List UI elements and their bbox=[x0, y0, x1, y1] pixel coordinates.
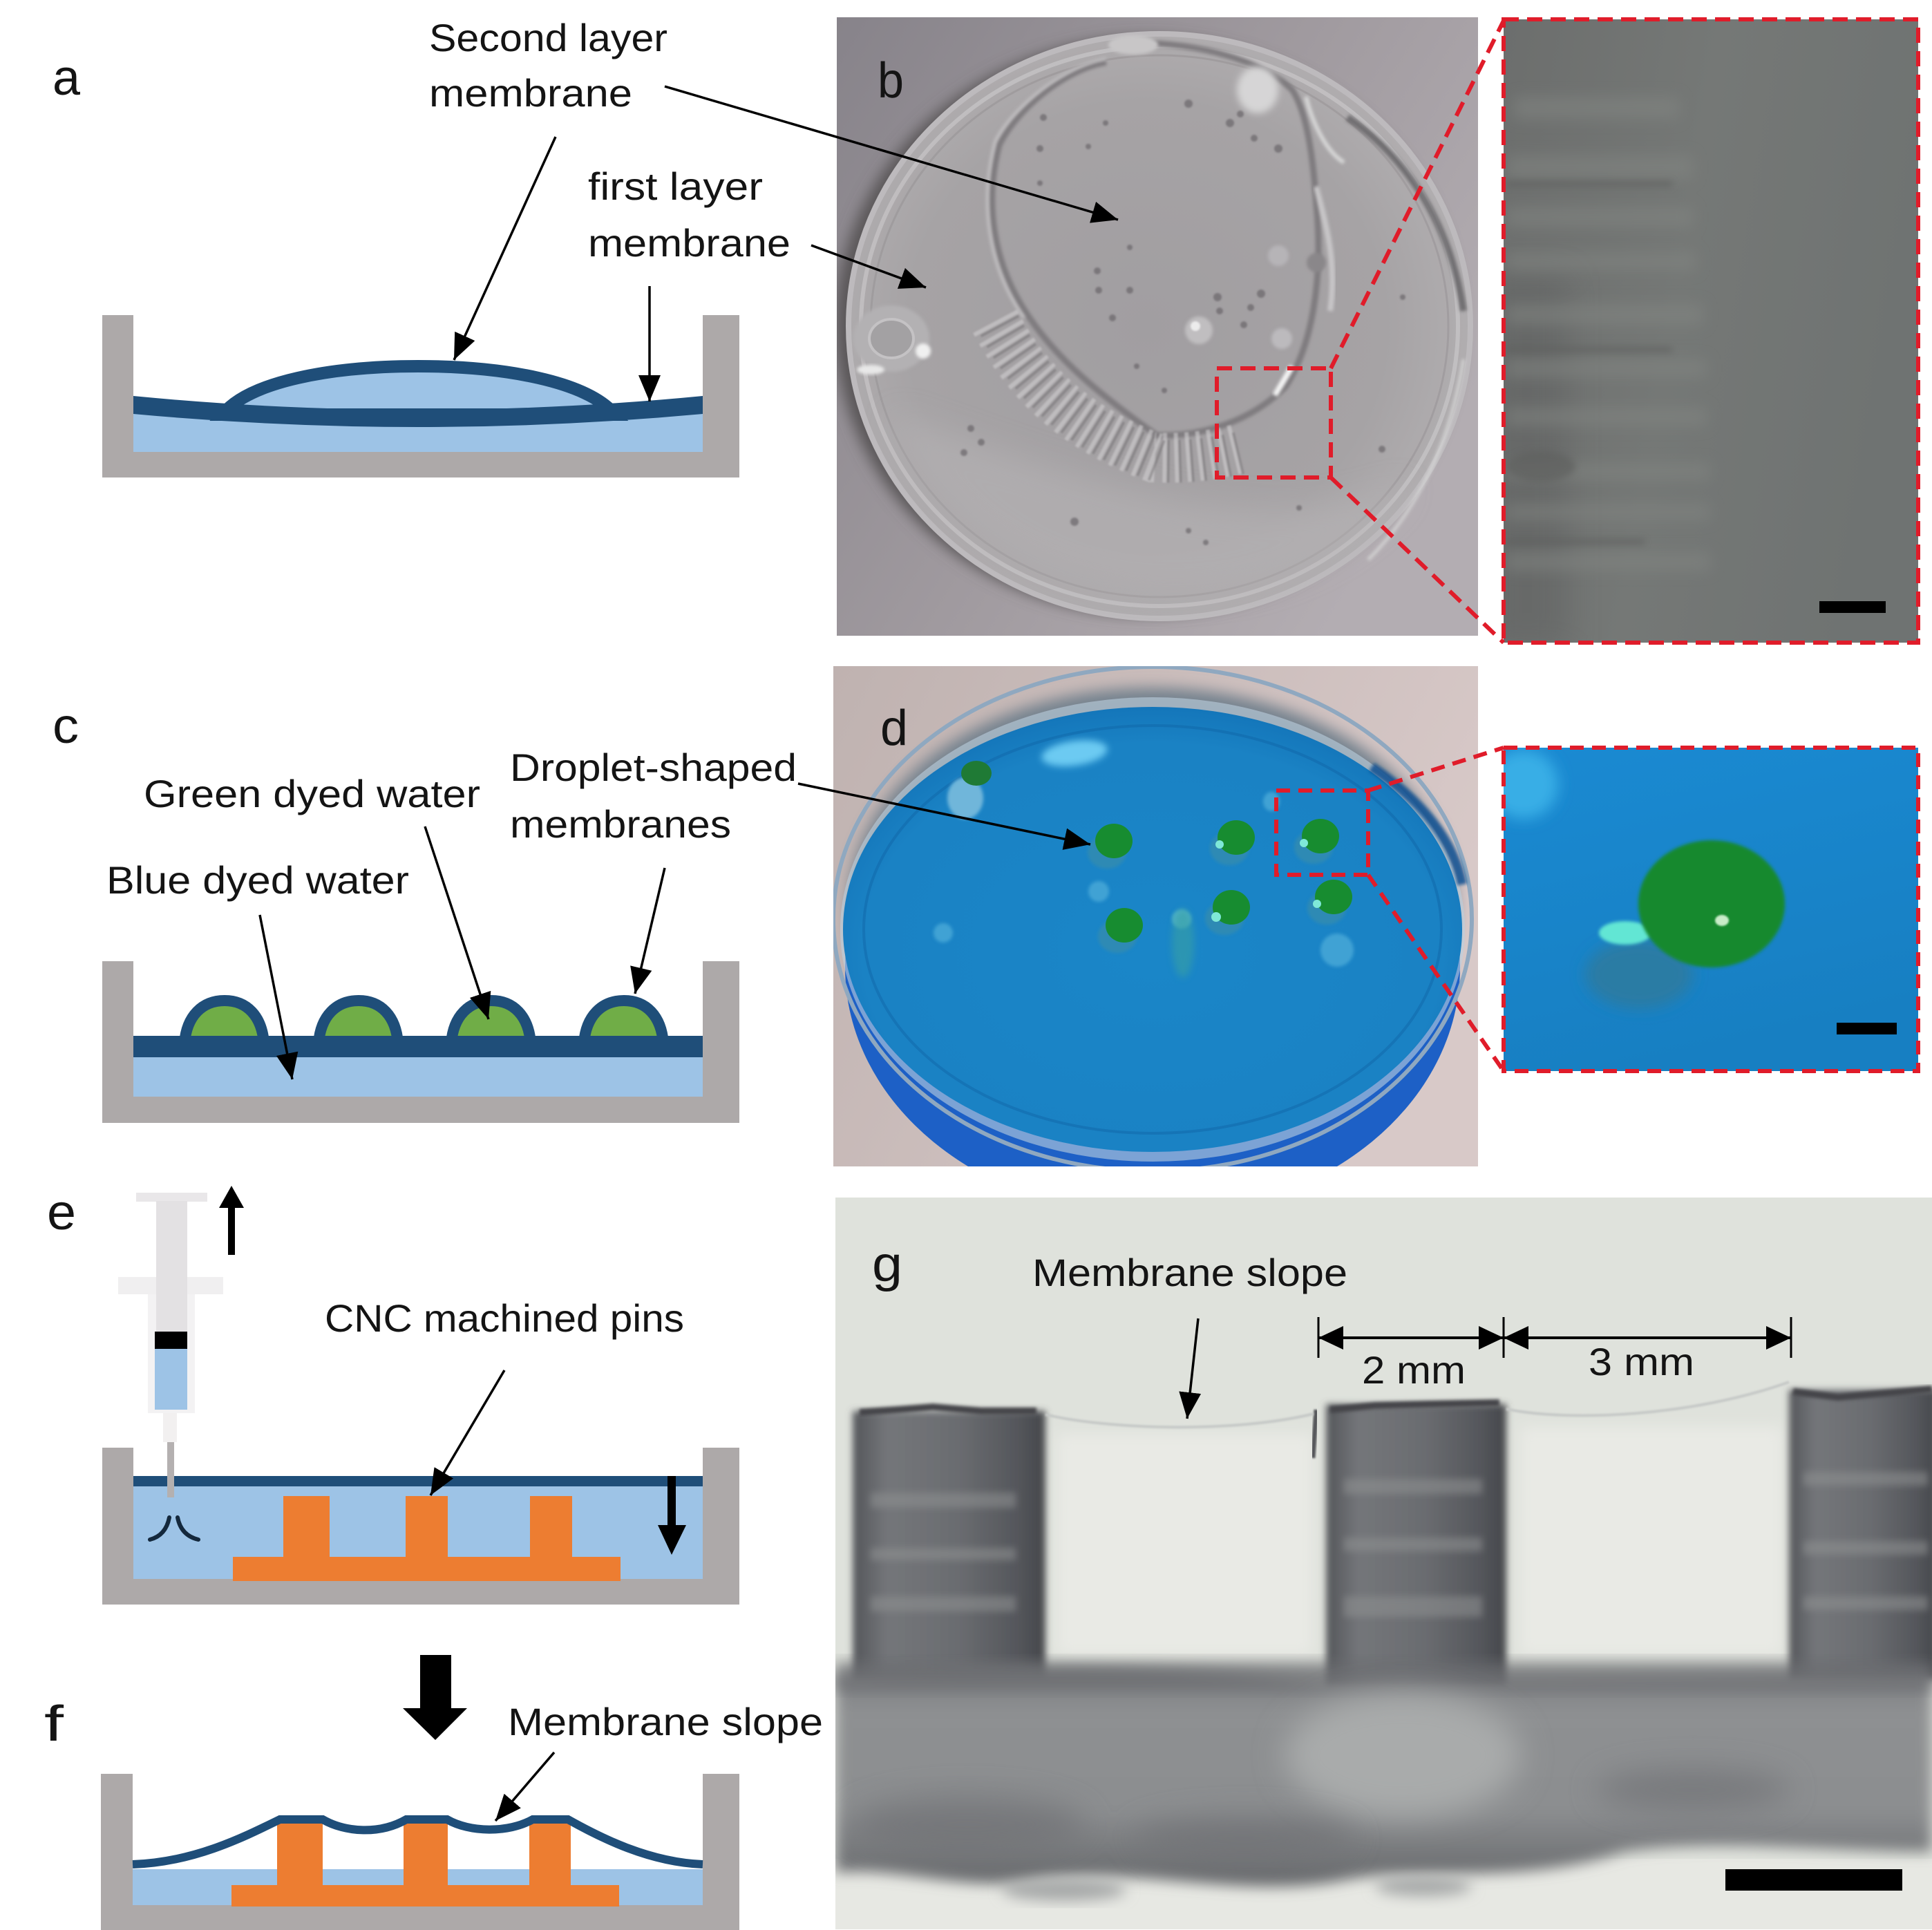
arrow: syringe up bbox=[219, 1186, 244, 1255]
callout arrows bbox=[260, 86, 1198, 1821]
faint green trails bbox=[1172, 909, 1194, 978]
droplet shadow bbox=[1585, 940, 1693, 1009]
panel f: membrane slope schematic bbox=[101, 1774, 739, 1930]
first layer membrane bbox=[133, 396, 703, 427]
arrow: level down bbox=[658, 1476, 686, 1555]
panel letter e: e bbox=[47, 1185, 76, 1240]
droplet highlight bbox=[1599, 921, 1651, 945]
dish b bbox=[849, 34, 1470, 618]
radial ribs bbox=[995, 321, 1241, 462]
label: first layer membrane: first layer bbox=[588, 164, 763, 208]
arrow: first layer to membrane bbox=[648, 286, 651, 401]
panel a: membrane schematic bbox=[102, 315, 739, 477]
panel c: droplet schematic bbox=[102, 961, 739, 1123]
base dark patches bbox=[850, 1769, 1790, 1859]
label: membrane slope g: Membrane slope bbox=[1032, 1251, 1347, 1294]
background b bbox=[837, 17, 1478, 636]
container f bbox=[101, 1774, 739, 1930]
label: droplet-shaped membranes bbox=[510, 746, 797, 846]
arrow: droplet photo bbox=[798, 784, 1090, 844]
panel letter g: g bbox=[872, 1237, 902, 1292]
inset b background bbox=[1504, 19, 1918, 643]
droplet specular bbox=[1715, 915, 1729, 926]
base top dark blur bbox=[835, 1662, 1932, 1690]
dish lens bbox=[853, 305, 931, 375]
label: CNC machined pins: CNC machined pins bbox=[325, 1296, 684, 1340]
arrow: membrane slope f bbox=[495, 1752, 554, 1821]
air bubbles bbox=[960, 100, 1405, 545]
arrow: process step bbox=[403, 1655, 467, 1740]
lower background bbox=[835, 1859, 1932, 1929]
panel letter f: f bbox=[44, 1696, 64, 1752]
membrane e bbox=[133, 1476, 703, 1486]
photo g: pins with membrane bbox=[835, 1198, 1932, 1929]
arrow: second layer to dome bbox=[454, 137, 556, 360]
arrow: green water bbox=[425, 826, 489, 1019]
membrane film bbox=[1045, 1382, 1789, 1427]
arrow: blue water bbox=[260, 915, 292, 1079]
arrow: second layer to photo bbox=[665, 86, 1118, 220]
label: second layer membrane: membrane bbox=[429, 71, 632, 115]
small bubbles d bbox=[934, 792, 1354, 967]
frayed membrane edge bbox=[1313, 1410, 1316, 1458]
second layer boundary bbox=[992, 43, 1318, 435]
panel letter a: a bbox=[53, 50, 81, 106]
scale bar d bbox=[1837, 1023, 1897, 1034]
photo b: membrane in dish bbox=[835, 17, 1478, 636]
injection jets bbox=[150, 1517, 198, 1540]
pins g bbox=[853, 1389, 1932, 1687]
background g bbox=[835, 1198, 1932, 1929]
reflection d bbox=[1040, 736, 1109, 770]
arrow: first layer to photo bbox=[811, 245, 926, 287]
arrow: membrane slope g bbox=[1187, 1318, 1198, 1419]
inset b: magnified membrane edge bbox=[1486, 19, 1918, 650]
label: first layer membrane: membrane bbox=[588, 221, 790, 265]
syringe bbox=[118, 1193, 223, 1497]
sloped membrane bbox=[133, 1819, 703, 1864]
background d bbox=[833, 666, 1478, 1166]
label: first layer membrane bbox=[588, 164, 790, 265]
water a bbox=[133, 406, 703, 452]
scale bar b bbox=[1819, 601, 1886, 613]
CNC pins f bbox=[231, 1822, 619, 1907]
second layer membrane dome bbox=[222, 366, 615, 415]
panel e: syringe and pins schematic bbox=[102, 1186, 739, 1605]
scale bar g bbox=[1725, 1869, 1902, 1891]
CNC pins e bbox=[233, 1496, 621, 1581]
container e bbox=[102, 1448, 739, 1605]
droplets d bbox=[947, 761, 1352, 953]
base lower bumps bbox=[1002, 1877, 1472, 1901]
clear gaps between pins bbox=[1057, 1427, 1783, 1655]
base light patch bbox=[1285, 1693, 1520, 1817]
droplet domes bbox=[184, 1001, 663, 1043]
red callout d bbox=[1276, 748, 1918, 1071]
large bubbles bbox=[1185, 245, 1326, 349]
dimension: 2 mm: 2 mm bbox=[1362, 1348, 1466, 1392]
bright reflections bbox=[1237, 66, 1278, 113]
dimension: 2 mm bbox=[1318, 1317, 1504, 1392]
dimension: 3 mm: 3 mm bbox=[1589, 1340, 1694, 1383]
container c bbox=[102, 961, 739, 1123]
label: droplet-shaped membranes: membranes bbox=[510, 802, 731, 846]
label: droplet-shaped membranes: Droplet-shaped bbox=[510, 746, 797, 789]
water e bbox=[133, 1484, 703, 1579]
red callout b bbox=[1217, 19, 1918, 643]
pin rough tops bbox=[860, 1389, 1932, 1412]
panel letter c: c bbox=[53, 699, 79, 754]
green droplet bbox=[1638, 840, 1785, 967]
label: blue dyed water: Blue dyed water bbox=[106, 858, 409, 902]
water f bbox=[133, 1869, 703, 1905]
lower-left lighter dish floor bbox=[940, 448, 1367, 574]
membrane ribs bbox=[1506, 97, 1710, 571]
light blob bbox=[1489, 750, 1558, 819]
dish body d bbox=[833, 667, 1472, 1216]
blue water c bbox=[133, 1057, 703, 1097]
left side dark wash bbox=[1486, 276, 1569, 650]
letter d: d bbox=[880, 701, 908, 756]
base g bbox=[835, 1668, 1932, 1886]
label: second layer membrane: Second layer bbox=[429, 16, 667, 59]
membrane band c bbox=[133, 1036, 703, 1057]
inset d: magnified droplet bbox=[1489, 748, 1918, 1071]
arrow: droplet membrane bbox=[635, 868, 665, 994]
arrow: CNC pins bbox=[430, 1370, 504, 1495]
label: green dyed water: Green dyed water bbox=[144, 772, 480, 815]
letter b: b bbox=[878, 53, 904, 108]
photo d: droplets in dyed water bbox=[833, 666, 1478, 1216]
inset d background bbox=[1504, 748, 1918, 1071]
label: membrane slope f: Membrane slope bbox=[508, 1700, 823, 1743]
container a bbox=[102, 315, 739, 477]
label: second layer membrane bbox=[429, 16, 667, 115]
